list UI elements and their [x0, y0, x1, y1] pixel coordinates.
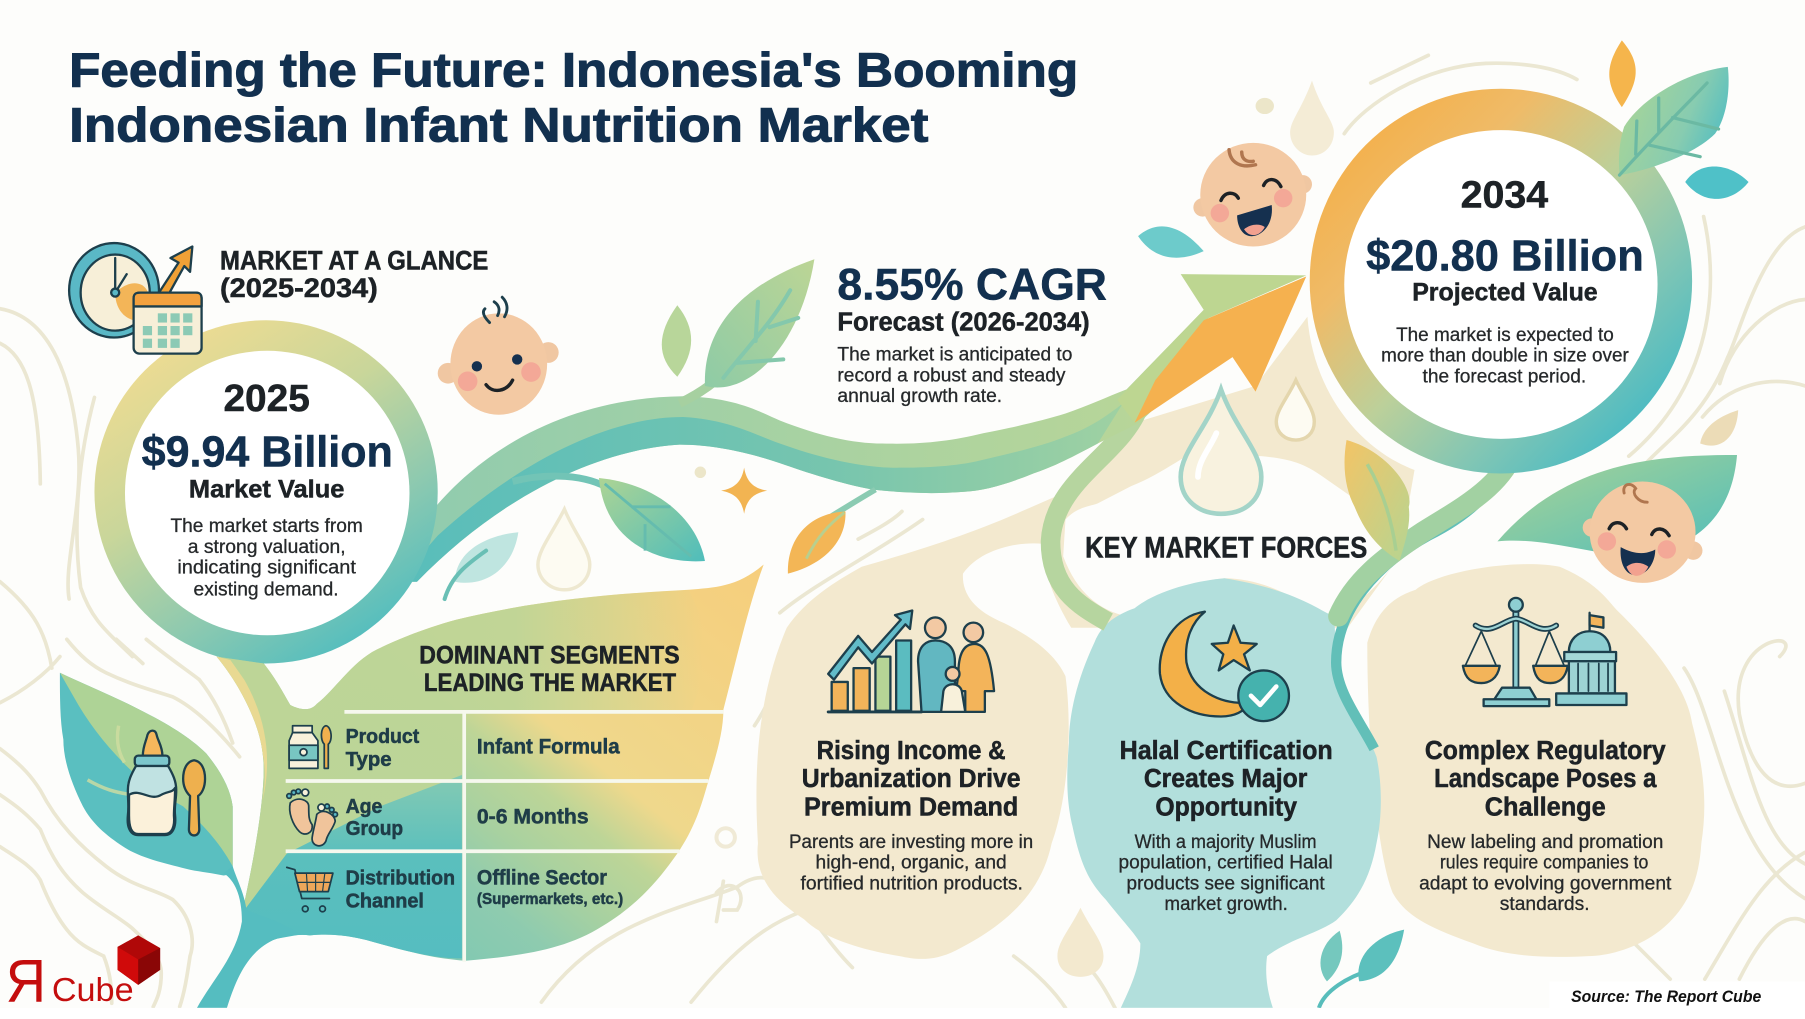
text: 2034 projected value: more than double in size over — [1381, 346, 1629, 367]
sparkle star — [721, 468, 767, 514]
text: CAGR: The market is anticipated to — [837, 345, 1072, 366]
text: 2025 market value: 2025 — [223, 378, 310, 420]
heading: dominant segments: DOMINANT SEGMENTS — [419, 642, 680, 670]
ring: 2034 — [1310, 89, 1692, 473]
icon: crescent star check — [1160, 612, 1289, 721]
icon: spoon — [183, 760, 205, 835]
text: CAGR: annual growth rate. — [837, 386, 1002, 407]
text: regulatory card: Complex Regulatory — [1425, 737, 1666, 765]
row: distribution channel: (Supermarkets, etc.) — [477, 891, 623, 908]
droplet cream lower — [1057, 908, 1104, 977]
text: 2025 market value: Market Value — [189, 476, 344, 504]
source note — [1549, 981, 1805, 1009]
text: regulatory card: Challenge — [1485, 794, 1606, 822]
text: rising income card: high-end, organic, and — [816, 853, 1007, 874]
row: age group: Age — [346, 795, 382, 818]
top droplet cream — [1290, 81, 1334, 156]
row: product type: Type — [346, 748, 392, 771]
pale leaf — [445, 532, 518, 599]
text: 2034 projected value: The market is expected to — [1396, 325, 1614, 346]
icon: scales and government building — [1463, 598, 1626, 706]
logo: report cube — [6, 935, 160, 1015]
text: regulatory card: adapt to evolving government — [1419, 873, 1672, 894]
row: age group: Group — [346, 817, 403, 840]
title: Feeding the Future: Indonesia's Booming — [69, 43, 1078, 97]
row: product type — [289, 725, 620, 771]
text: 2025 market value: a strong valuation, — [188, 537, 346, 558]
yellow band on leaf edge — [217, 657, 267, 801]
heading: market at a glance: MARKET AT A GLANCE — [220, 246, 488, 276]
text: halal card: With a majority Muslim — [1135, 832, 1317, 853]
text: 2025 market value: indicating significant — [177, 558, 357, 579]
ring: 2025 — [94, 320, 438, 664]
source note: Source: The Report Cube — [1571, 987, 1761, 1006]
text: 2025 market value: The market starts from — [170, 516, 363, 537]
text: rising income card: Rising Income & — [817, 737, 1006, 765]
heading: dominant segments: LEADING THE MARKET — [424, 669, 677, 697]
panel: left leaf with bottle — [60, 673, 233, 875]
text: halal card: Creates Major — [1144, 765, 1307, 793]
icon: baby bottle — [128, 731, 176, 835]
teal leaf under vine — [513, 476, 705, 561]
text: 2034 projected value: 2034 — [1461, 174, 1548, 216]
text: 2034 projected value: the forecast period. — [1423, 366, 1586, 387]
heading: market at a glance — [220, 246, 488, 303]
baby face: right laughing — [1583, 482, 1702, 583]
table grid lines — [286, 712, 723, 962]
text: halal card: Halal Certification — [1120, 737, 1333, 765]
panel: halal blob — [1067, 578, 1381, 1008]
row: distribution channel: Offline Sector — [477, 866, 607, 890]
text: 2034 projected value: Projected Value — [1412, 279, 1598, 307]
text: halal card — [1118, 737, 1333, 915]
text: CAGR — [837, 259, 1107, 407]
title: Indonesian Infant Nutrition Market — [69, 99, 928, 153]
teal leaf left of happy baby — [1138, 226, 1204, 258]
beige leaf right — [1700, 410, 1738, 446]
baby face: left — [438, 297, 559, 415]
row: distribution channel: Channel — [346, 890, 424, 913]
text: 2025 market value: existing demand. — [194, 580, 339, 601]
text: regulatory card: standards. — [1500, 894, 1590, 915]
row: age group — [287, 789, 589, 846]
row: distribution channel — [287, 866, 623, 913]
milk droplet small — [1276, 380, 1314, 440]
green upper left of leaf — [217, 590, 714, 913]
icon: formula jar and spoon — [289, 726, 331, 768]
arrow head — [1117, 274, 1306, 423]
arrow orange facet — [1135, 276, 1306, 423]
text: CAGR: record a robust and steady — [837, 365, 1066, 386]
text: 2034 projected value: $20.80 Billion — [1366, 232, 1644, 281]
vine: right stem from 2034 ring to halal panel — [1336, 443, 1509, 749]
heading: market at a glance: (2025-2034) — [220, 273, 378, 303]
orange leaf top right — [1609, 40, 1636, 107]
text: CAGR: Forecast (2026-2034) — [837, 309, 1090, 337]
heading: dominant segments — [419, 642, 680, 697]
text: CAGR: 8.55% CAGR — [837, 259, 1107, 310]
icon: baby feet — [287, 789, 338, 846]
teal leaf right — [1685, 166, 1749, 199]
text: regulatory card: Landscape Poses a — [1434, 765, 1657, 793]
growth vine with arrow — [397, 274, 1306, 582]
ring inner: 2025 — [125, 351, 409, 635]
text: halal card: market growth. — [1165, 894, 1288, 915]
text: 2025 market value — [142, 378, 393, 601]
top right leaf — [1619, 67, 1729, 175]
small dots — [695, 98, 1274, 478]
row: age group: 0-6 Months — [477, 805, 589, 829]
ring inner: 2034 — [1344, 130, 1658, 439]
text: halal card: population, certified Halal — [1118, 853, 1333, 874]
deco lines near orange leaf — [780, 511, 923, 613]
row: product type: Product — [346, 725, 419, 748]
icon: rising chart and family — [828, 611, 994, 712]
vine: green stem under 2034 ring — [1338, 438, 1518, 616]
green upper leaf surface — [60, 673, 233, 866]
icon: shopping cart — [287, 867, 333, 912]
panel: regulatory blob — [1367, 564, 1704, 957]
heading: key market forces: KEY MARKET FORCES — [1085, 532, 1367, 565]
teal stem joining leaves — [197, 866, 302, 1008]
leaf: yellow green near arrow — [1345, 440, 1410, 561]
droplet outline — [538, 509, 590, 590]
text: rising income card: Parents are investing more in — [789, 832, 1033, 853]
row: product type: Infant Formula — [477, 734, 620, 758]
milk droplet large — [1181, 389, 1261, 514]
text: 2025 market value: $9.94 Billion — [142, 428, 393, 477]
title — [69, 43, 1078, 153]
text: rising income card: Urbanization Drive — [802, 765, 1021, 793]
text: halal card: products see significant — [1127, 873, 1325, 894]
text: rising income card: Premium Demand — [804, 794, 1018, 822]
row: distribution channel: Distribution — [346, 867, 455, 890]
text: regulatory card: rules require companies to — [1440, 853, 1648, 874]
leaf behind smiling baby — [1497, 455, 1737, 556]
icon: clock, calendar, arrow — [69, 243, 202, 354]
panel: rising income blob — [756, 490, 1071, 959]
text: rising income card: fortified nutrition products. — [801, 873, 1023, 894]
baby face: top laughing — [1193, 143, 1312, 247]
text: 2034 projected value — [1366, 174, 1644, 387]
vine body — [397, 310, 1221, 582]
text: regulatory card — [1419, 737, 1672, 915]
white space around key market forces — [1063, 456, 1400, 616]
text: rising income card — [789, 737, 1033, 894]
vine teal underside — [397, 403, 1123, 582]
teal sprout bottom — [1319, 930, 1404, 1008]
green sprout from vine — [662, 259, 814, 403]
logo: report cube: Я — [6, 948, 46, 1015]
bottom white strip — [0, 1008, 1805, 1019]
text: halal card: Opportunity — [1155, 794, 1298, 822]
panel: dominant segments leaf — [217, 564, 764, 961]
branch stem: left of key forces — [1051, 403, 1140, 622]
cream backdrop under arrow — [1042, 317, 1415, 628]
orange leaf with stem — [788, 490, 875, 574]
teal lower left of leaf — [242, 775, 462, 958]
text: regulatory card: New labeling and promation — [1427, 832, 1663, 853]
logo: report cube: Cube — [52, 972, 134, 1009]
